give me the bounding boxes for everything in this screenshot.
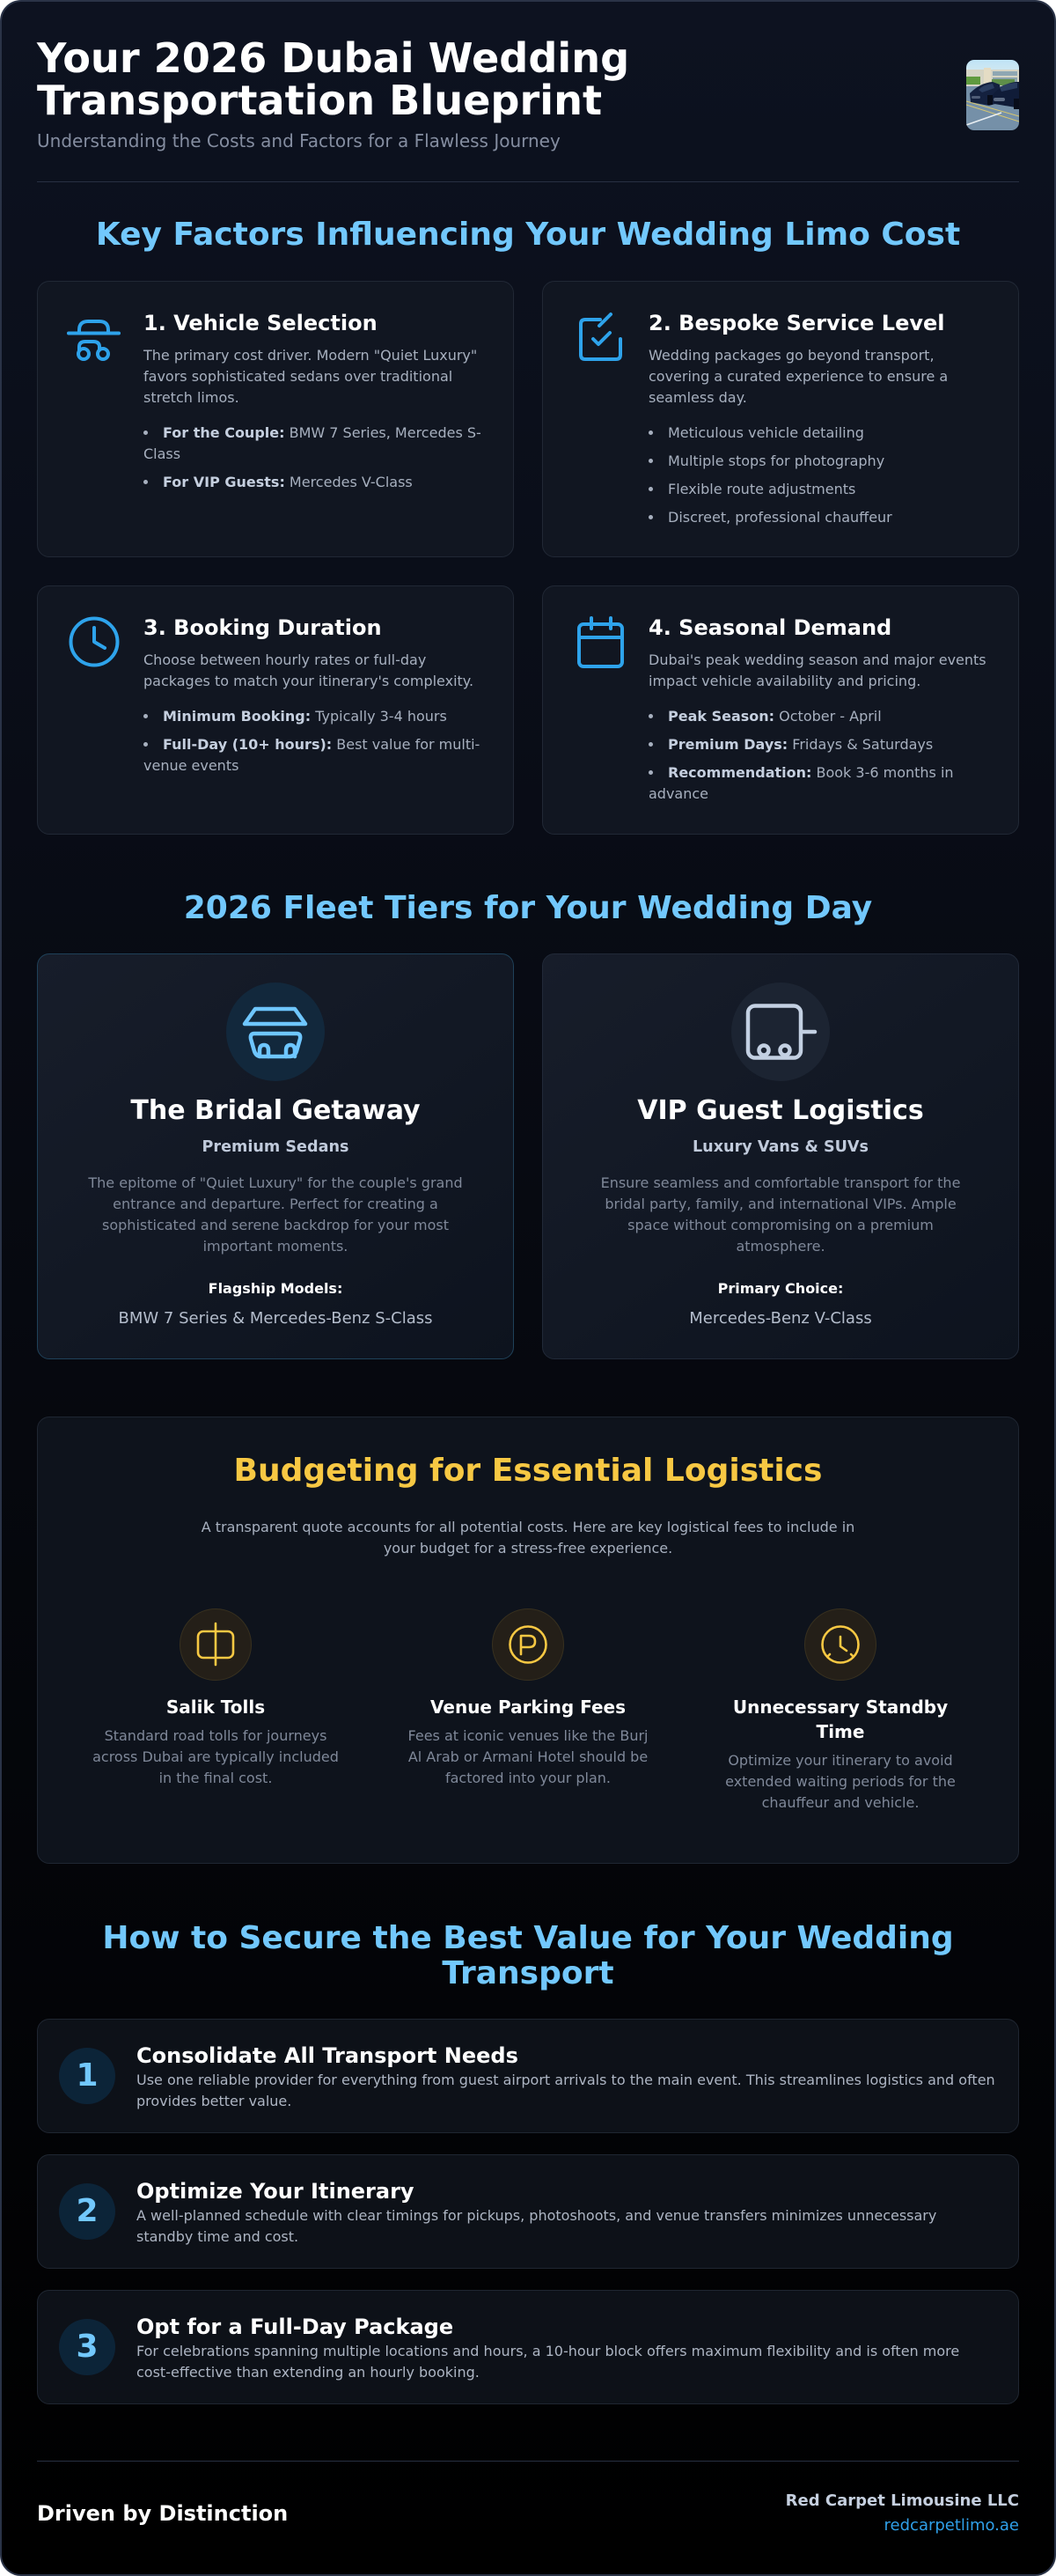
text: service level: 2. Bespoke Service Level — [649, 311, 945, 335]
panel: booking duration — [37, 585, 514, 835]
step text: cost-effective than extending an hourly booking. — [136, 2364, 480, 2381]
tier name: VIP Guest Logistics — [637, 1095, 924, 1126]
step text: For celebrations spanning multiple locations and hours, a 10-hour block offers maximum flexibility and is often more — [136, 2343, 959, 2359]
step text: Use one reliable provider for everything from guest airport arrivals to the main event. This streamlines logistics and often — [136, 2072, 995, 2088]
text: vehicle selection: For VIP Guests: Mercedes V-Class — [163, 474, 413, 489]
tier description: atmosphere. — [736, 1238, 825, 1255]
item description — [92, 1727, 339, 1786]
section heading: best value: Transport — [442, 1955, 614, 1991]
icon: clock — [69, 616, 120, 667]
tier description — [601, 1174, 960, 1255]
footer tagline: Driven by Distinction — [37, 2501, 288, 2526]
section heading: best value — [102, 1920, 954, 1991]
step text: standby time and cost. — [136, 2228, 298, 2245]
item title: Unnecessary Standby — [733, 1696, 948, 1718]
column: parking fees — [408, 1608, 648, 1786]
column: salik tolls — [92, 1608, 339, 1786]
text: vehicle selection: For the Couple: BMW 7 Series, Mercedes S-Class — [143, 424, 481, 461]
item title — [733, 1696, 948, 1742]
text: seasonal demand: Premium Days: Fridays & Saturdays — [668, 736, 933, 752]
panel: service level — [542, 281, 1019, 557]
text: booking duration: Minimum Booking: Typically 3-4 hours — [163, 708, 447, 724]
panel: budgeting — [37, 1417, 1019, 1864]
icon: calendar — [577, 616, 624, 668]
text: vehicle selection: The primary cost driver. Modern "Quiet Luxury" favors sophisticated sedans over traditional stretch limos. — [143, 347, 477, 405]
item description — [725, 1752, 956, 1811]
text: service level: Wedding packages go beyond transport, covering a curated experience to ensure a seamless day. — [649, 347, 948, 405]
text: service level: Discreet, professional chauffeur — [668, 509, 892, 525]
text: seasonal demand — [649, 615, 986, 801]
icon: vehicle — [67, 320, 121, 361]
item description: in the final cost. — [159, 1770, 272, 1786]
section heading: best value: How to Secure the Best Value for Your Wedding — [102, 1920, 954, 1956]
icon: checklist — [579, 312, 622, 361]
tier description: entrance and departure. Perfect for creating a — [113, 1196, 438, 1212]
step title: Consolidate All Transport Needs — [136, 2042, 518, 2067]
item description: extended waiting periods for the — [725, 1773, 956, 1790]
step number: 3 — [76, 2329, 99, 2365]
text: booking duration: 3. Booking Duration — [143, 615, 382, 640]
text: seasonal demand: Recommendation: Book 3-6 months in advance — [649, 764, 954, 801]
icon: toll gate — [180, 1608, 252, 1681]
panel: vehicle selection — [37, 281, 514, 557]
step number: 2 — [76, 2193, 99, 2229]
icon: parking — [492, 1608, 564, 1681]
text: seasonal demand: 4. Seasonal Demand — [649, 615, 891, 640]
item description: Optimize your itinerary to avoid — [728, 1752, 953, 1769]
step text: A well-planned schedule with clear timings for pickups, photoshoots, and venue transfers minimizes unnecessary — [136, 2207, 936, 2224]
step title: Optimize Your Itinerary — [136, 2178, 414, 2203]
intro text: A transparent quote accounts for all potential costs. Here are key logistical fees to include in — [202, 1519, 854, 1535]
text: service level: Multiple stops for photography — [668, 453, 884, 468]
panel: seasonal demand — [542, 585, 1019, 835]
tier type: Premium Sedans — [202, 1137, 348, 1155]
title: Your 2026 Dubai Wedding — [37, 34, 629, 82]
step text — [136, 2207, 936, 2245]
footer company: Red Carpet Limousine LLC — [786, 2491, 1019, 2510]
step number — [59, 2183, 115, 2240]
intro text: your budget for a stress-free experience. — [384, 1540, 672, 1557]
text: service level: Meticulous vehicle detailing — [668, 424, 864, 440]
text: booking duration — [143, 615, 480, 773]
text: service level: Flexible route adjustments — [668, 481, 855, 497]
text: seasonal demand: Peak Season: October - April — [668, 708, 882, 724]
panel: bridal getaway — [37, 953, 514, 1359]
text: seasonal demand: Dubai's peak wedding season and major events impact vehicle availability and pricing. — [649, 651, 986, 688]
models label: Flagship Models: — [209, 1280, 342, 1296]
title: Transportation Blueprint — [37, 77, 602, 124]
text: vehicle selection — [143, 311, 481, 489]
item description: Standard road tolls for journeys — [105, 1727, 326, 1744]
item title: Time — [817, 1721, 864, 1742]
text: service level — [649, 311, 948, 525]
item title: Venue Parking Fees — [430, 1696, 626, 1718]
text: vehicle selection: 1. Vehicle Selection — [143, 311, 378, 335]
header divider — [37, 181, 1019, 182]
text: booking duration: Choose between hourly rates or full-day packages to match your itinerary's complexity. — [143, 651, 473, 688]
tier description: bridal party, family, and international VIPs. Ample — [605, 1196, 957, 1212]
footer website: redcarpetlimo.ae — [884, 2516, 1019, 2535]
step text — [136, 2072, 995, 2109]
step 2 — [37, 2154, 1019, 2269]
step number: 1 — [76, 2057, 99, 2094]
item description — [408, 1727, 648, 1786]
step number — [59, 2048, 115, 2104]
item description: Fees at iconic venues like the Burj — [408, 1727, 648, 1744]
models: Mercedes-Benz V-Class — [689, 1309, 872, 1328]
tier name: The Bridal Getaway — [130, 1095, 421, 1126]
step title: Opt for a Full-Day Package — [136, 2314, 453, 2338]
tier description: important moments. — [203, 1238, 348, 1255]
step 1 — [37, 2019, 1019, 2133]
column: standby time — [725, 1608, 956, 1811]
tier description: space without compromising on a premium — [627, 1217, 934, 1233]
tier description: sophisticated and serene backdrop for your most — [102, 1217, 449, 1233]
section heading: fleet tiers: 2026 Fleet Tiers for Your Wedding Day — [184, 890, 872, 926]
text: booking duration: Full-Day (10+ hours): Best value for multi-venue events — [143, 736, 480, 773]
step number — [59, 2319, 115, 2375]
image: parked luxury sedans — [966, 60, 1019, 130]
icon: premium sedan — [226, 983, 325, 1081]
icon: standby clock — [804, 1608, 876, 1681]
intro text — [201, 1519, 854, 1557]
step 3 — [37, 2290, 1019, 2404]
step text — [136, 2343, 959, 2381]
heading: budgeting: Budgeting for Essential Logistics — [234, 1453, 822, 1489]
tier type: Luxury Vans & SUVs — [693, 1137, 869, 1155]
item title: Salik Tolls — [166, 1696, 265, 1718]
tier description — [88, 1174, 463, 1255]
subtitle: Understanding the Costs and Factors for a Flawless Journey — [37, 130, 561, 151]
icon: luxury van — [731, 983, 830, 1081]
footer divider — [37, 2461, 1019, 2462]
item description: chauffeur and vehicle. — [762, 1794, 919, 1811]
tier description: The epitome of "Quiet Luxury" for the couple's grand — [88, 1174, 463, 1191]
item description: across Dubai are typically included — [92, 1748, 339, 1765]
section heading: key factors: Key Factors Influencing Your Wedding Limo Cost — [96, 217, 960, 253]
tier description: Ensure seamless and comfortable transport for the — [601, 1174, 960, 1191]
item description: Al Arab or Armani Hotel should be — [408, 1748, 648, 1765]
models label: Primary Choice: — [718, 1280, 843, 1296]
step text: provides better value. — [136, 2093, 291, 2109]
models: BMW 7 Series & Mercedes-Benz S-Class — [118, 1309, 433, 1328]
title — [37, 34, 629, 124]
item description: factored into your plan. — [445, 1770, 611, 1786]
panel: vip guest logistics — [542, 953, 1019, 1359]
